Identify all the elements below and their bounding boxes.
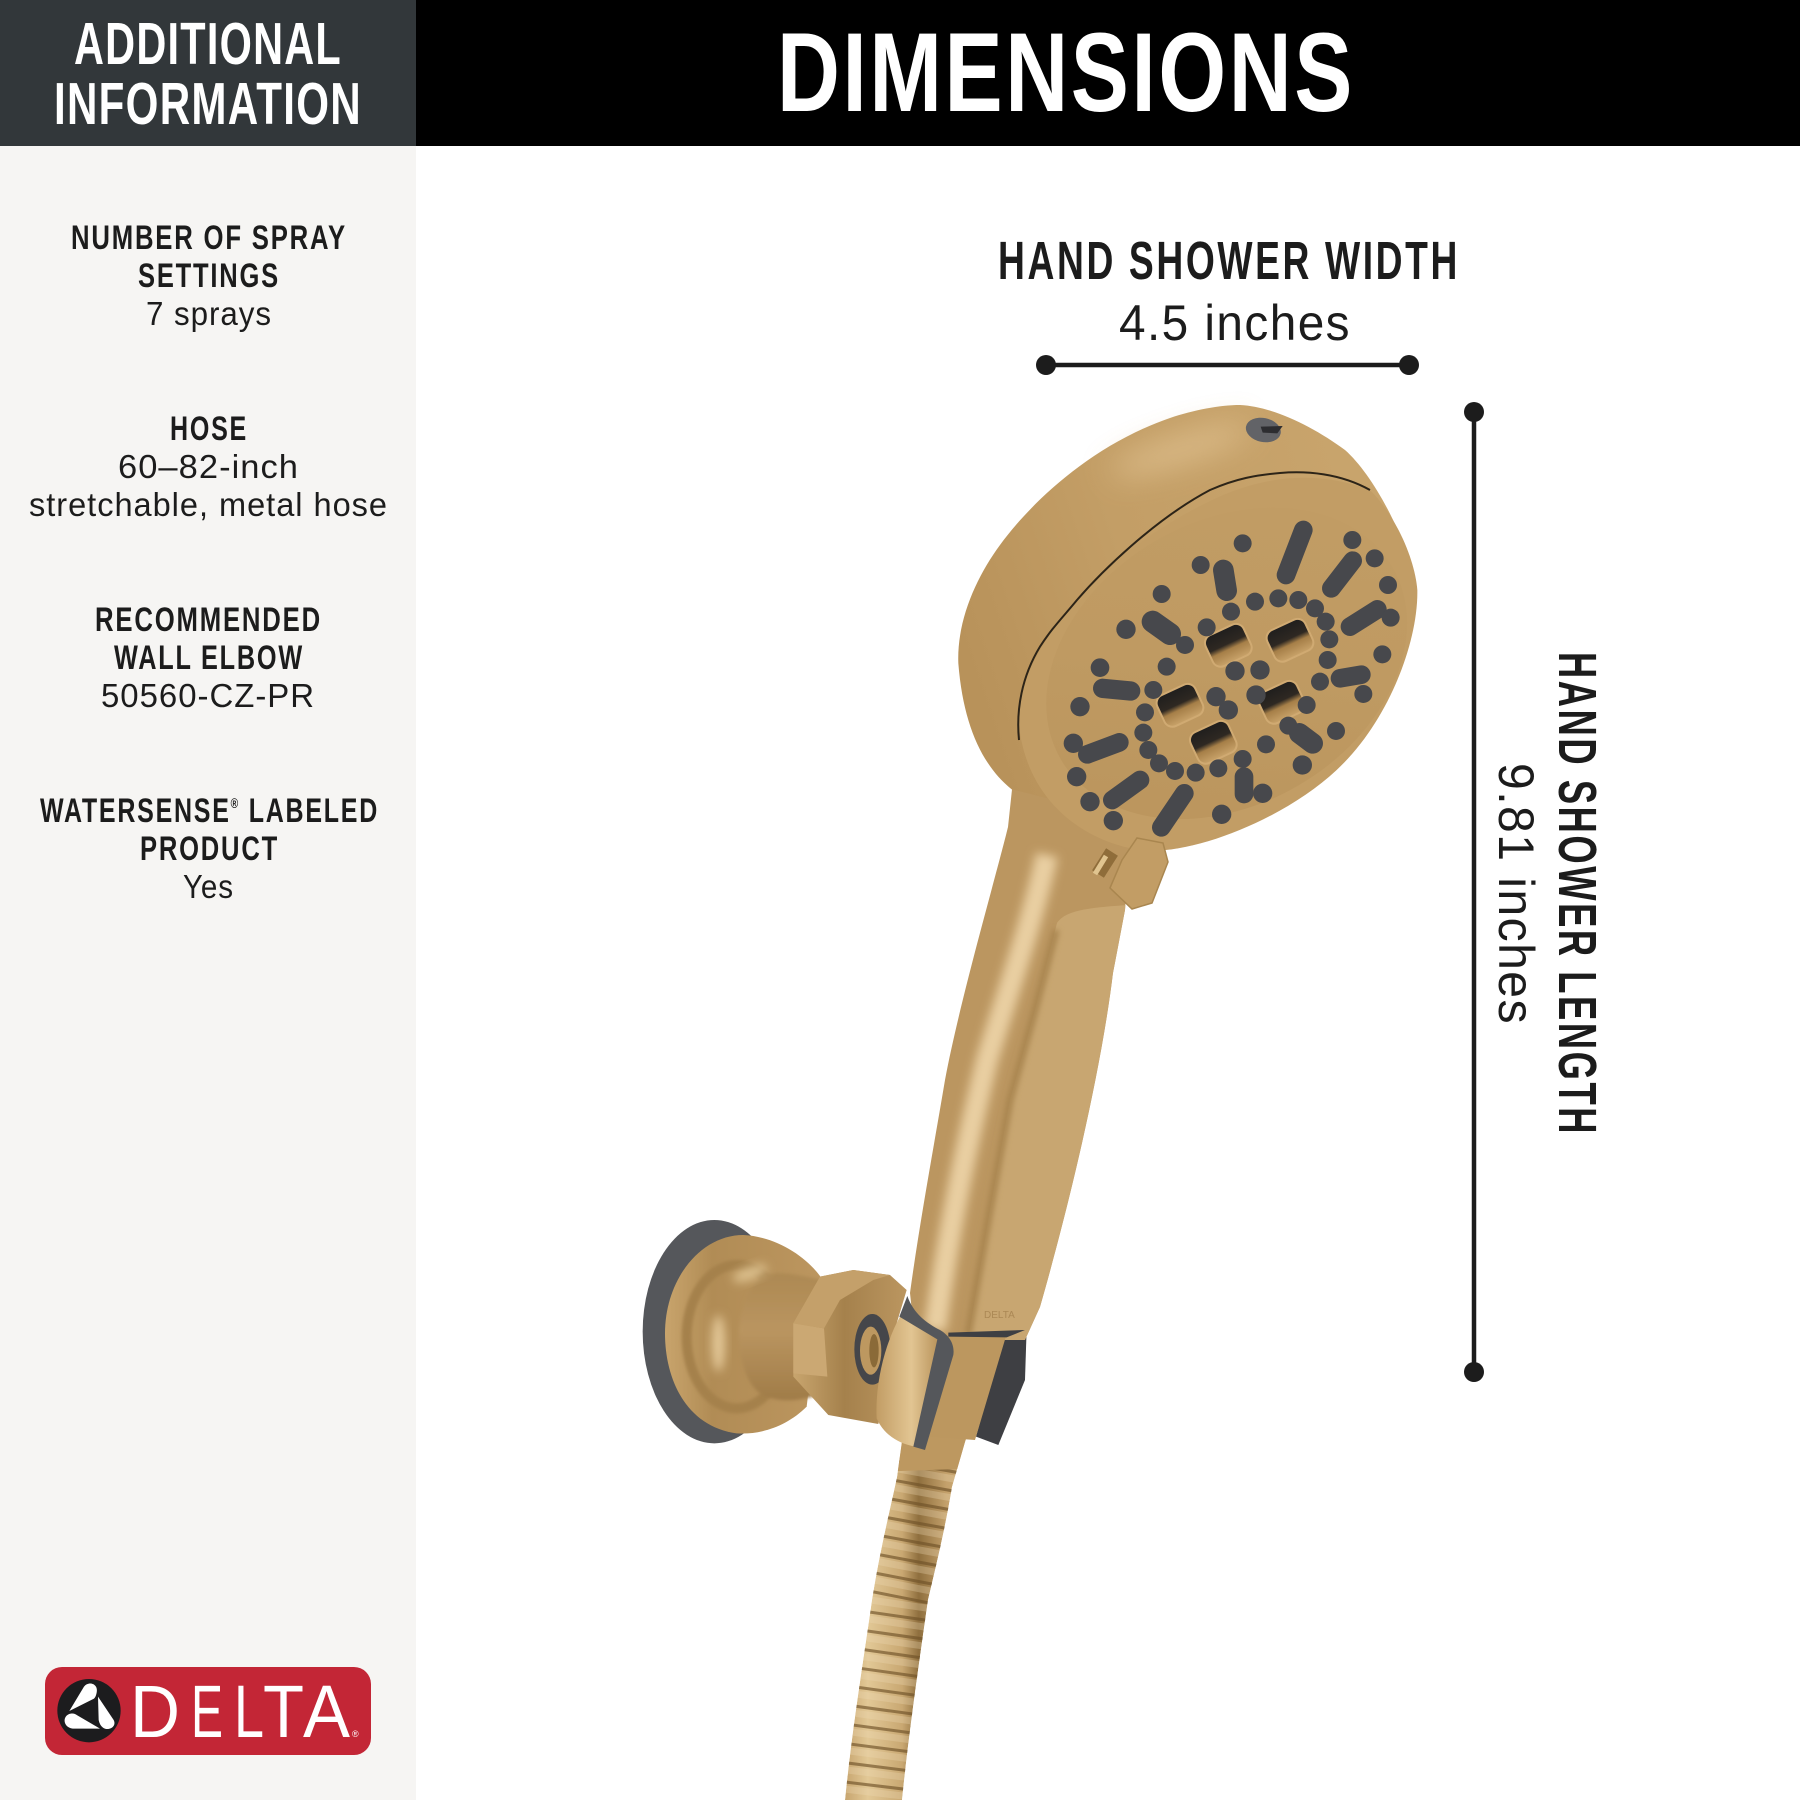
header bar: additional information [0, 0, 416, 146]
icon: delta tri-drop mark [57, 1679, 121, 1742]
hand shower length label: 9.81 inches [1488, 763, 1544, 1025]
hand shower width label: 4.5 inches [1119, 295, 1351, 351]
center spray openings [1154, 616, 1316, 767]
ball joint [854, 1314, 890, 1385]
logo wordmark: A [303, 1670, 351, 1753]
header bar: additional information: ADDITIONAL [74, 11, 342, 77]
spec: hose: stretchable, metal hose [29, 486, 388, 523]
wall flange [643, 1220, 786, 1443]
shell highlight [1106, 415, 1254, 485]
spec: watersense labeled product [40, 792, 379, 905]
holder bracket [876, 1296, 1025, 1450]
spec: watersense labeled product: ® [231, 795, 240, 811]
hand shower width label: HAND SHOWER WIDTH [998, 231, 1460, 291]
header bar: additional information: INFORMATION [54, 71, 362, 137]
spec: number of spray settings [71, 219, 347, 332]
trigger [1110, 838, 1168, 909]
logo wordmark: T [263, 1670, 304, 1753]
hose [845, 1436, 966, 1800]
spec: hose: HOSE [170, 410, 248, 448]
spec: watersense labeled product: PRODUCT [140, 830, 279, 868]
spec: recommended wall elbow: 50560-CZ-PR [101, 677, 315, 714]
logo wordmark [130, 1670, 351, 1753]
panel: additional information sidebar [0, 146, 416, 1800]
wall mount [643, 1220, 1027, 1445]
spec: number of spray settings: 7 sprays [146, 295, 272, 332]
logo: delta: ® [352, 1729, 359, 1739]
hand shower length label: HAND SHOWER LENGTH [1547, 652, 1607, 1136]
parting line [1018, 472, 1370, 740]
spec: watersense labeled product: Yes [183, 868, 234, 905]
spec: watersense labeled product: WATERSENSE [40, 792, 299, 830]
spec: number of spray settings: SETTINGS [138, 257, 280, 295]
mount nut [793, 1270, 907, 1424]
spec: recommended wall elbow: WALL ELBOW [114, 639, 304, 677]
length dimension line [1464, 402, 1484, 1382]
face plate [990, 445, 1463, 882]
top button [1244, 415, 1283, 445]
mount stem [739, 1273, 823, 1400]
width dimension line [1036, 355, 1419, 375]
round nozzles [1064, 531, 1400, 830]
spec: hose: 60–82-inch [118, 448, 299, 485]
rear clip [976, 1328, 1027, 1445]
spec: hose [29, 410, 388, 523]
hand shower width label [998, 231, 1460, 351]
logo wordmark: D [130, 1670, 180, 1753]
back shell [958, 405, 1417, 813]
header bar: dimensions: DIMENSIONS [777, 10, 1355, 135]
logo: delta [45, 1667, 371, 1755]
header bar: dimensions [416, 0, 1800, 146]
pill nozzles [1087, 530, 1377, 827]
spec: number of spray settings: NUMBER OF SPRAY [71, 219, 347, 257]
handle [910, 790, 1130, 1340]
face rim [1018, 478, 1417, 851]
spec: recommended wall elbow: RECOMMENDED [95, 601, 322, 639]
handle engraved mark: DELTA [984, 1310, 1015, 1321]
spec: watersense labeled product: LABELED [240, 792, 379, 830]
logo wordmark: E [191, 1670, 223, 1753]
spec: recommended wall elbow [95, 601, 322, 714]
logo wordmark: L [234, 1670, 264, 1753]
product: hand shower illustration [643, 405, 1463, 1800]
shower head [958, 405, 1463, 882]
hand shower length label [1488, 652, 1607, 1136]
